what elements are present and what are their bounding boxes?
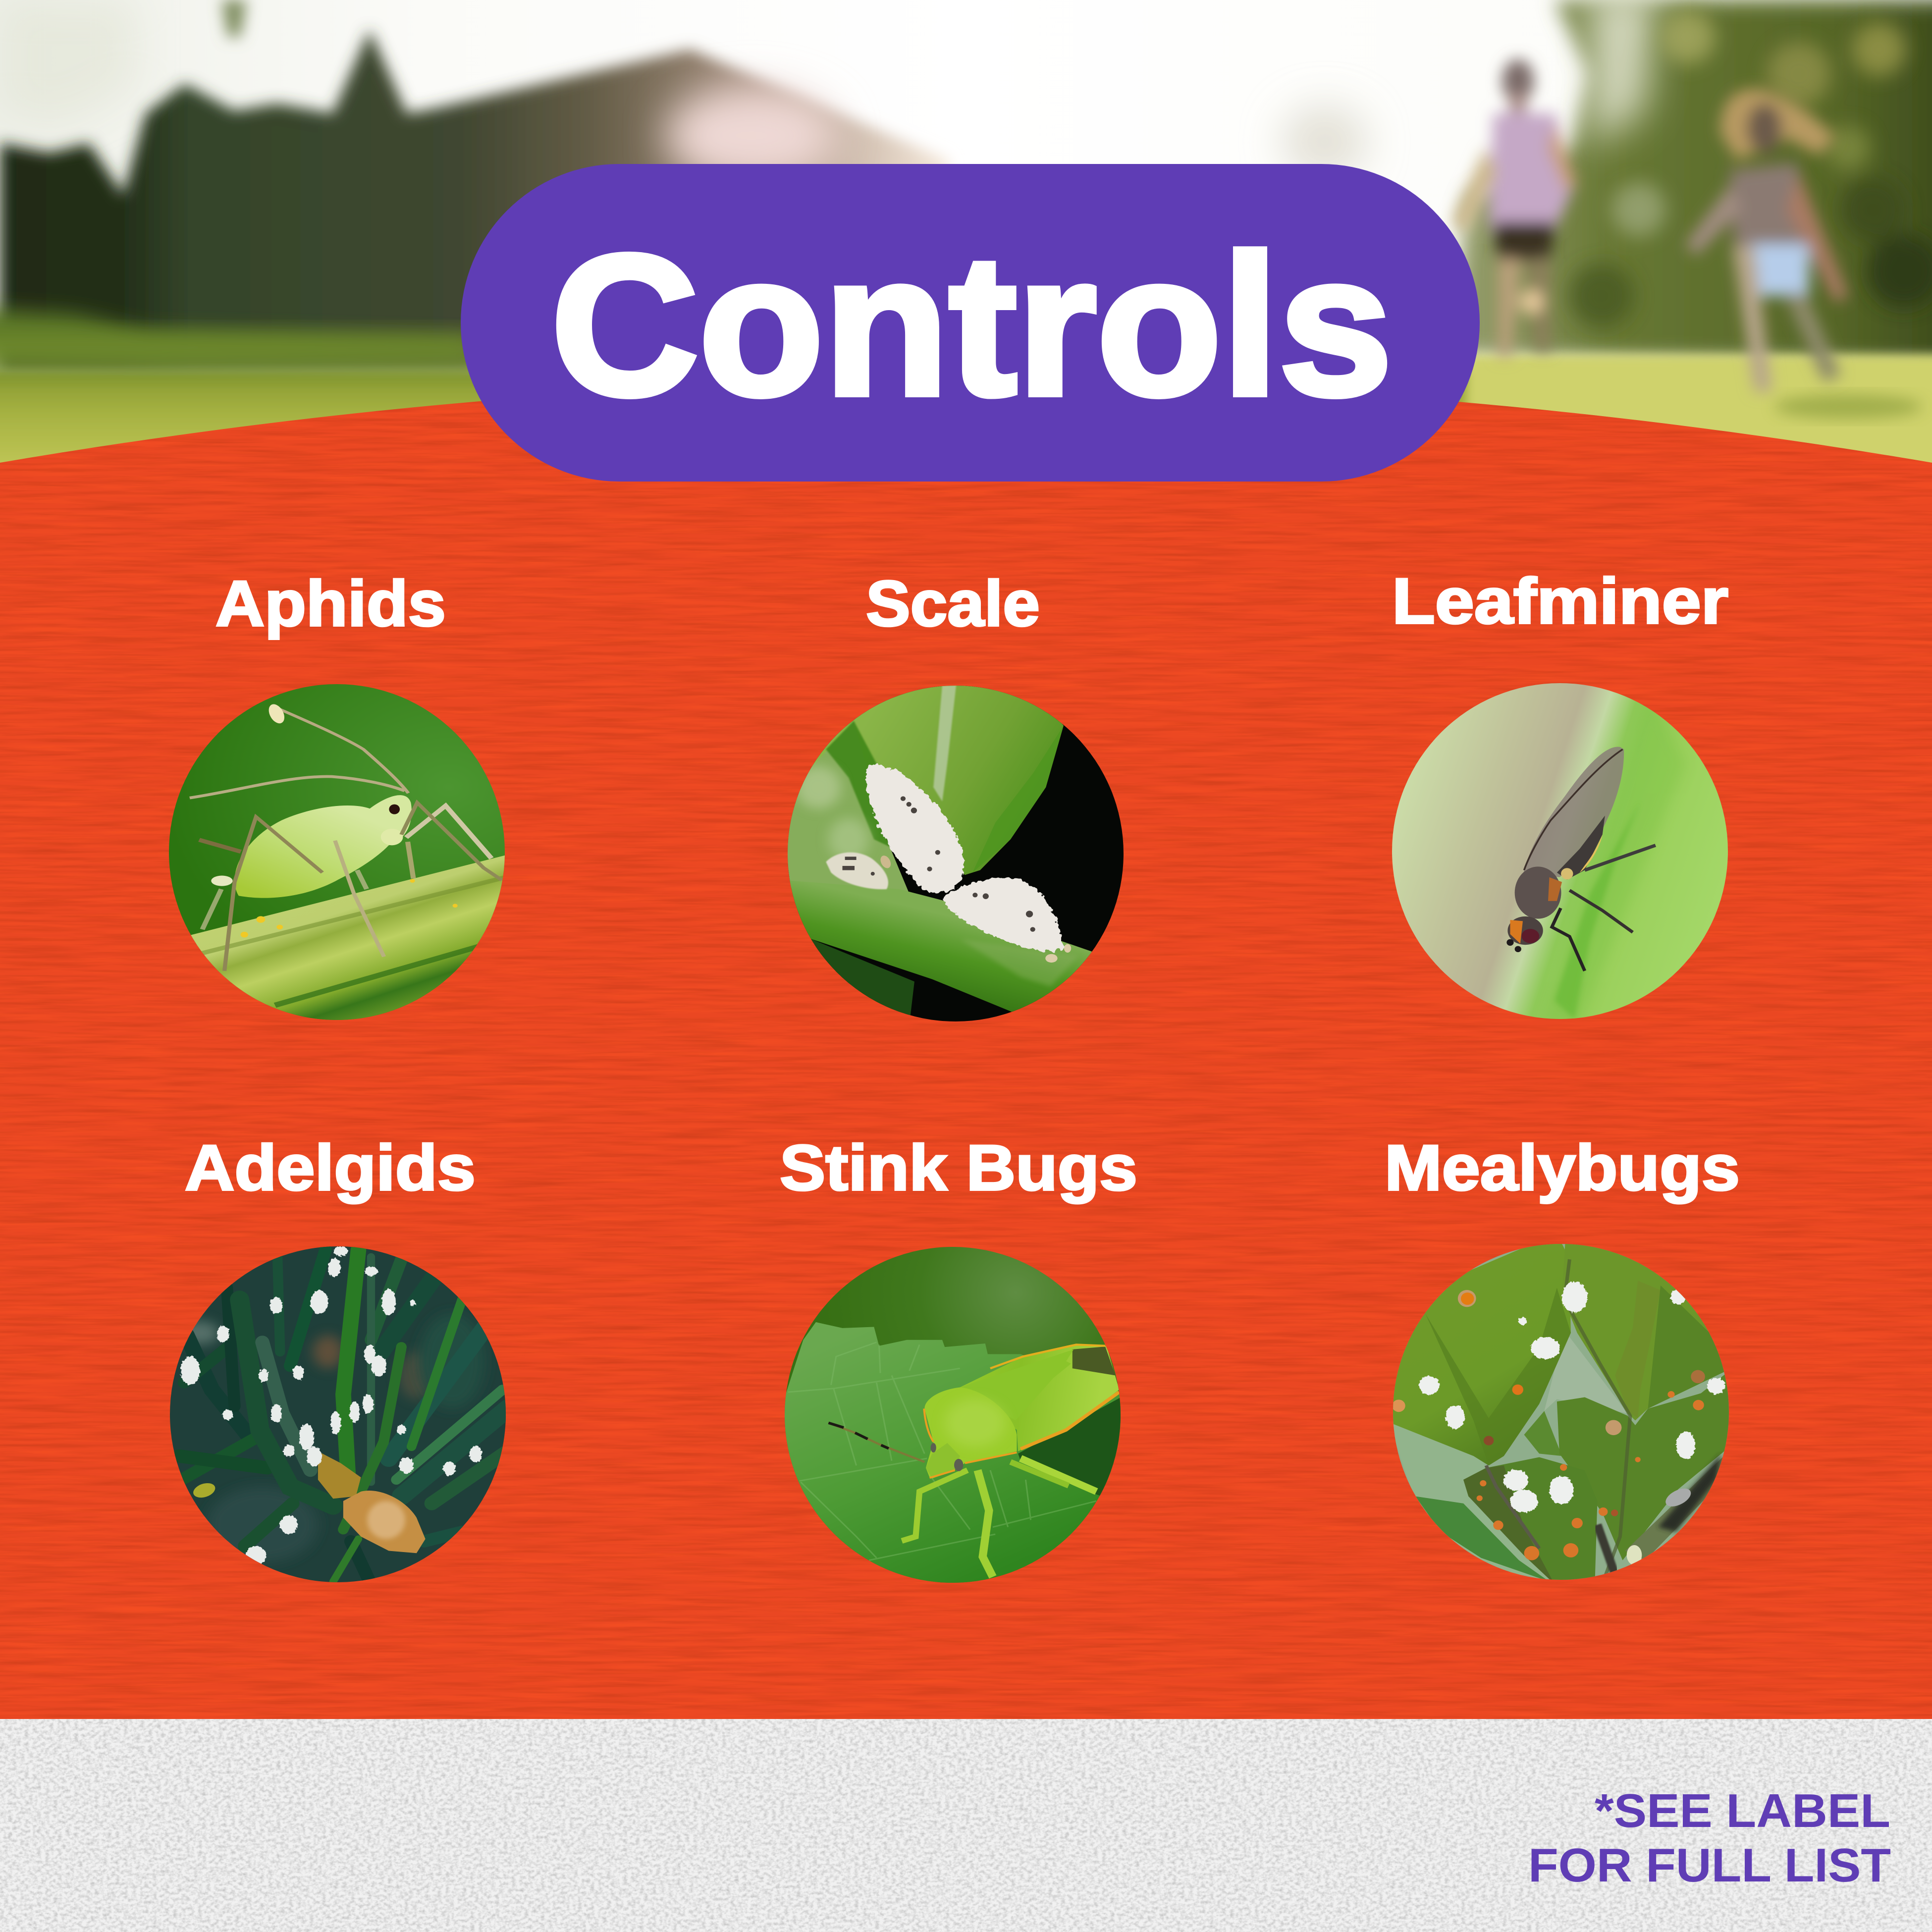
photo: green stink bug on leaf xyxy=(768,1229,1164,1600)
photo: aphid on stem xyxy=(169,684,505,1020)
panel: Leafminer xyxy=(1362,565,1759,1040)
red wood panel with curved top xyxy=(0,277,1932,1724)
title: Controls xyxy=(551,213,1393,437)
child running right xyxy=(1685,89,1848,392)
title pill xyxy=(461,164,1480,482)
footnote xyxy=(1528,1784,1891,1892)
child running left xyxy=(1451,59,1577,357)
photo: adelgids on conifer needles xyxy=(149,1229,545,1600)
panel: Mealybugs xyxy=(1362,1131,1759,1600)
heading: Aphids: Aphids xyxy=(215,567,446,640)
photo: scale insects on leaf xyxy=(768,669,1164,1040)
photo: leafminer fly on leaf xyxy=(1362,669,1759,1040)
footnote line 1: *SEE LABEL xyxy=(1595,1784,1890,1837)
footnote line 2: FOR FULL LIST xyxy=(1528,1839,1891,1892)
photo: mealybugs on leaves xyxy=(1362,1229,1759,1600)
heading: Mealybugs: Mealybugs xyxy=(1385,1131,1740,1204)
white plaster footer band xyxy=(0,1719,1932,1932)
heading: Scale: Scale xyxy=(866,567,1040,640)
background photo: backyard with children running xyxy=(0,0,1932,518)
heading: Stink Bugs: Stink Bugs xyxy=(780,1131,1137,1204)
panel: Aphids xyxy=(149,567,644,1040)
panel: Adelgids xyxy=(149,1131,545,1600)
panel: Scale xyxy=(788,578,1124,1021)
panel: Stink Bugs xyxy=(768,1131,1164,1600)
heading: Adelgids: Adelgids xyxy=(185,1131,476,1204)
heading: Leafminer: Leafminer xyxy=(1392,565,1728,637)
